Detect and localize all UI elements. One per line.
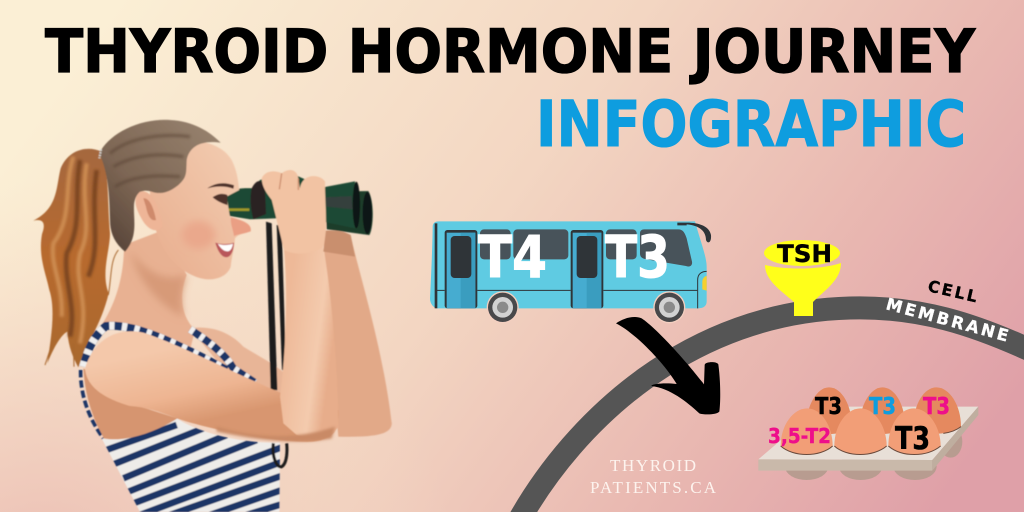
bus label T3: T3 <box>605 223 670 291</box>
yellow label <box>228 208 249 211</box>
neck strap stripes <box>83 326 227 370</box>
upper arm <box>85 331 338 442</box>
highlight <box>325 196 353 209</box>
hair strands <box>110 136 190 187</box>
egg base lines <box>781 427 961 454</box>
mirror <box>677 223 711 242</box>
funnel rim <box>764 240 840 266</box>
lips and smile <box>215 243 234 257</box>
rubber band <box>251 181 266 219</box>
dark strands <box>66 160 97 337</box>
tray top <box>758 407 978 460</box>
windows <box>480 229 692 266</box>
egg label large: T3 <box>895 421 930 457</box>
woman with binoculars <box>33 120 392 512</box>
egg tray <box>758 387 978 480</box>
bus body <box>430 221 707 308</box>
neck strap <box>83 326 227 370</box>
headlight <box>702 276 707 291</box>
tray front <box>758 459 932 471</box>
hair tie <box>99 149 101 158</box>
bus label T4: T4 <box>478 223 547 291</box>
finger gaps <box>279 173 298 190</box>
membrane <box>518 308 1024 512</box>
back eggs <box>806 387 961 434</box>
waist line <box>436 289 697 292</box>
binoculars <box>226 175 373 235</box>
egg label 3,5-T2: 3,5-T2 <box>768 424 831 448</box>
ear <box>135 191 163 230</box>
hair cap <box>99 120 221 252</box>
tray shadows <box>785 426 962 480</box>
ear inner <box>143 198 156 220</box>
ponytail mass <box>33 149 110 367</box>
front eggs <box>781 408 941 454</box>
tray side <box>932 407 978 471</box>
back strap stripes <box>190 329 255 383</box>
membrane label: MEMBRANE <box>884 295 1011 345</box>
strap loop <box>273 443 287 467</box>
wisps <box>45 250 118 367</box>
egg label pink: T3 <box>923 394 950 420</box>
forearm <box>280 247 338 437</box>
far barrel <box>325 191 373 235</box>
neck <box>103 230 195 350</box>
TSH label: TSH <box>777 240 832 268</box>
wheel right <box>653 291 685 323</box>
near barrel <box>226 175 355 228</box>
cheek shade <box>182 221 215 249</box>
egg label blue: T3 <box>869 394 896 420</box>
near lens <box>353 182 360 228</box>
cell label: CELL <box>926 276 979 306</box>
far arm <box>323 230 392 437</box>
egg label black: T3 <box>815 394 842 420</box>
neck shade <box>130 250 187 317</box>
subtitle: INFOGRAPHIC <box>536 88 966 161</box>
teeth <box>218 244 233 251</box>
strands <box>53 157 87 343</box>
far lens <box>363 192 372 234</box>
elbow shade <box>217 427 335 441</box>
nose shade <box>231 217 251 236</box>
arrow <box>616 317 720 414</box>
rear stripe <box>435 223 437 308</box>
title: THYROID HORMONE JOURNEY <box>45 17 976 87</box>
shirt stripes <box>101 418 281 512</box>
door right <box>571 230 603 308</box>
back strap <box>190 329 255 383</box>
far shoulder <box>190 327 285 410</box>
far hand <box>323 231 355 257</box>
back skin <box>83 368 177 439</box>
strap <box>266 222 286 390</box>
bus <box>430 221 711 323</box>
funnel <box>764 240 841 316</box>
wheel left <box>487 291 519 323</box>
door left <box>445 230 477 308</box>
armhole trim <box>81 370 103 438</box>
face <box>150 141 251 279</box>
brand line 2: PATIENTS.CA <box>590 478 717 497</box>
near hand <box>262 170 326 254</box>
brand line 1: THYROID <box>610 456 696 475</box>
ponytail <box>33 149 118 367</box>
funnel body <box>765 263 841 316</box>
front door line <box>698 271 707 308</box>
eyebrow and eye <box>207 183 234 205</box>
